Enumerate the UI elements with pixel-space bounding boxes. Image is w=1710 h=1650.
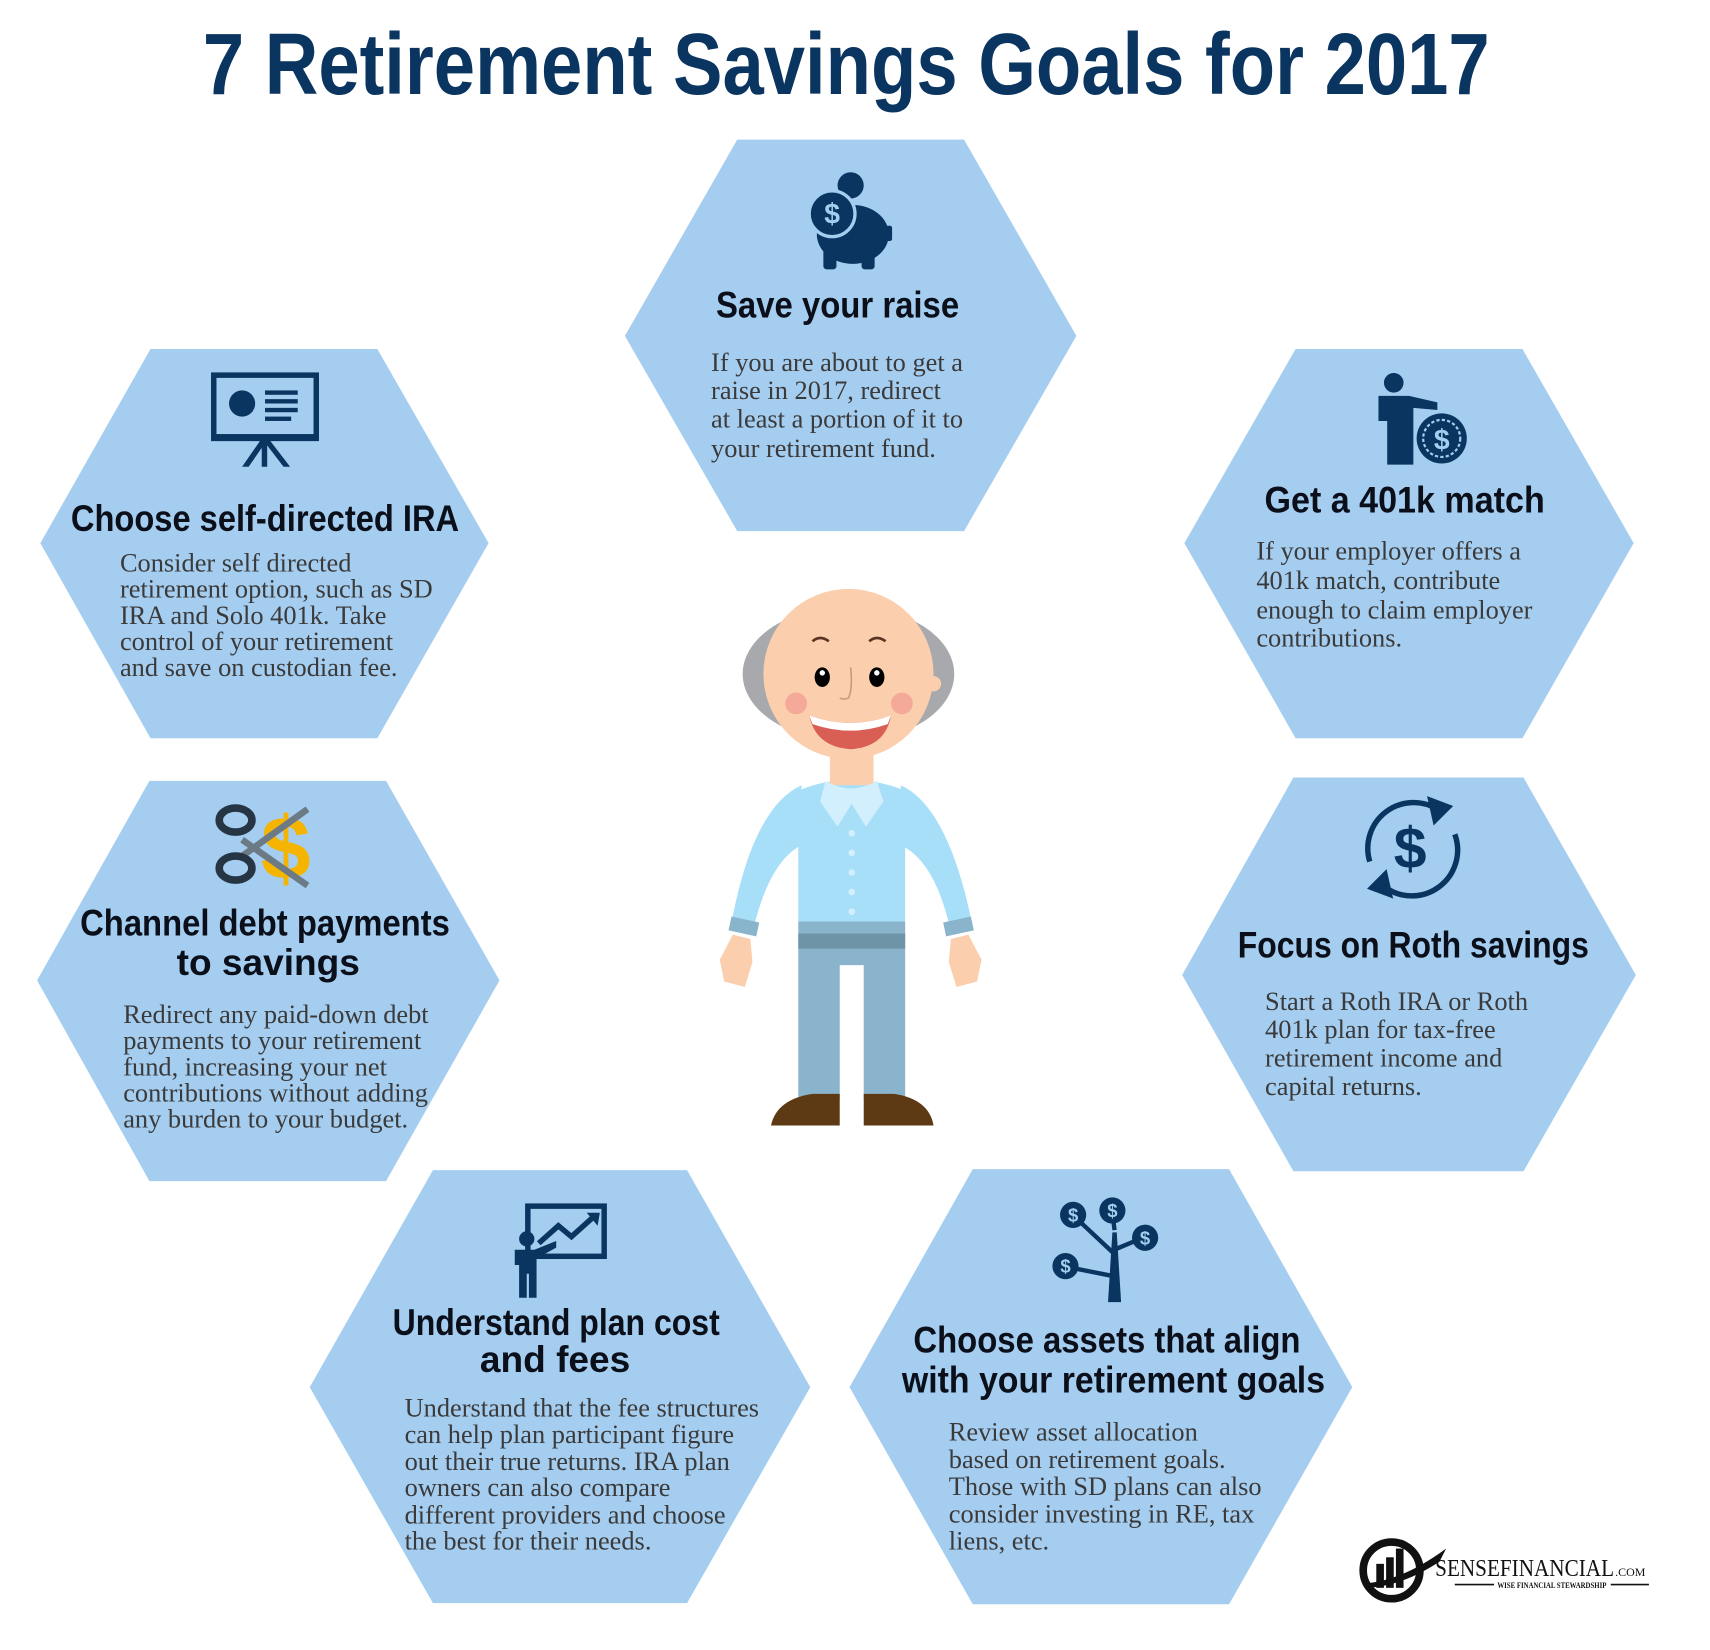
body text: the best for their needs. (405, 1526, 651, 1556)
icon: money tree: $ (1060, 1256, 1071, 1277)
icon: money tree: $ (1068, 1204, 1079, 1225)
panel: save your raise (625, 140, 1076, 531)
heading: Focus on Roth savings (1238, 924, 1589, 966)
body text: retirement income and (1265, 1043, 1502, 1073)
body text: can help plan participant figure (405, 1419, 734, 1449)
body text: IRA and Solo 401k. Take (120, 600, 386, 630)
panel: self-directed IRA (40, 349, 489, 738)
body text: Consider self directed (120, 547, 351, 577)
icon: piggy bank (809, 172, 892, 269)
body text: owners can also compare (405, 1472, 670, 1502)
body text: at least a portion of it to (711, 403, 963, 433)
body text: retirement option, such as SD (120, 574, 433, 604)
body text: control of your retirement (120, 626, 394, 656)
body text: Redirect any paid-down debt (123, 999, 429, 1029)
body text: consider investing in RE, tax (949, 1498, 1254, 1528)
body text: Understand that the fee structures (405, 1393, 759, 1423)
logo: sensefinancial: .COM (1615, 1565, 1646, 1579)
panel: choose assets (850, 1169, 1352, 1604)
body text: 401k plan for tax-free (1265, 1014, 1496, 1044)
panel: roth savings (1182, 778, 1636, 1171)
panel: channel debt payments (37, 781, 499, 1181)
heading: Get a 401k match (1265, 479, 1545, 521)
icon: scissors and dollar (219, 798, 311, 898)
body text: liens, etc. (949, 1526, 1049, 1556)
body text: raise in 2017, redirect (711, 375, 942, 405)
body text: 401k match, contribute (1256, 565, 1500, 595)
icon: dollar cycle: $ (1394, 816, 1426, 881)
body text: and save on custodian fee. (120, 652, 398, 682)
illustration: old man (720, 589, 982, 1125)
body text: any burden to your budget. (123, 1104, 408, 1134)
body text: Start a Roth IRA or Roth (1265, 986, 1528, 1016)
icon: money tree: $ (1140, 1227, 1151, 1248)
logo: sensefinancial: WISE FINANCIAL STEWARDSHIP (1497, 1580, 1607, 1590)
panel: 401k match (1184, 349, 1634, 738)
body text: different providers and choose (405, 1499, 726, 1529)
title: 7 Retirement Savings Goals for 2017 (203, 16, 1490, 113)
icon: presentation board (214, 375, 316, 467)
icon: piggy bank: $ (824, 199, 840, 231)
icon: money tree (1052, 1197, 1158, 1302)
icon: businessman with coin (1378, 373, 1467, 465)
body text: contributions without adding (123, 1077, 428, 1107)
heading: to savings (177, 941, 360, 983)
panel: plan cost and fees (310, 1170, 810, 1603)
body text: contributions. (1256, 623, 1402, 653)
heading: with your retirement goals (901, 1359, 1325, 1401)
icon: dollar cycle (1368, 800, 1458, 896)
body text: If your employer offers a (1256, 535, 1521, 565)
body text: your retirement fund. (711, 433, 936, 463)
logo: sensefinancial (1363, 1542, 1649, 1599)
body text: If you are about to get a (711, 347, 963, 377)
heading: and fees (480, 1338, 630, 1380)
body text: fund, increasing your net (123, 1051, 388, 1081)
body text: capital returns. (1265, 1071, 1422, 1101)
icon: money tree: $ (1107, 1200, 1118, 1221)
body text: payments to your retirement (123, 1025, 422, 1055)
logo: sensefinancial: SENSEFINANCIAL (1435, 1556, 1614, 1582)
heading: Save your raise (716, 283, 959, 325)
icon: scissors and dollar: $ (261, 798, 311, 898)
heading: Channel debt payments (80, 902, 450, 944)
icon: businessman with coin: $ (1434, 424, 1450, 456)
body text: Review asset allocation (949, 1417, 1198, 1447)
heading: Choose assets that align (913, 1318, 1300, 1360)
body text: enough to claim employer (1256, 594, 1533, 624)
icon: presenter with chart (515, 1206, 604, 1298)
body text: based on retirement goals. (949, 1444, 1226, 1474)
heading: Understand plan cost (393, 1301, 720, 1343)
body text: Those with SD plans can also (949, 1471, 1262, 1501)
heading: Choose self-directed IRA (71, 497, 459, 539)
body text: out their true returns. IRA plan (405, 1446, 730, 1476)
